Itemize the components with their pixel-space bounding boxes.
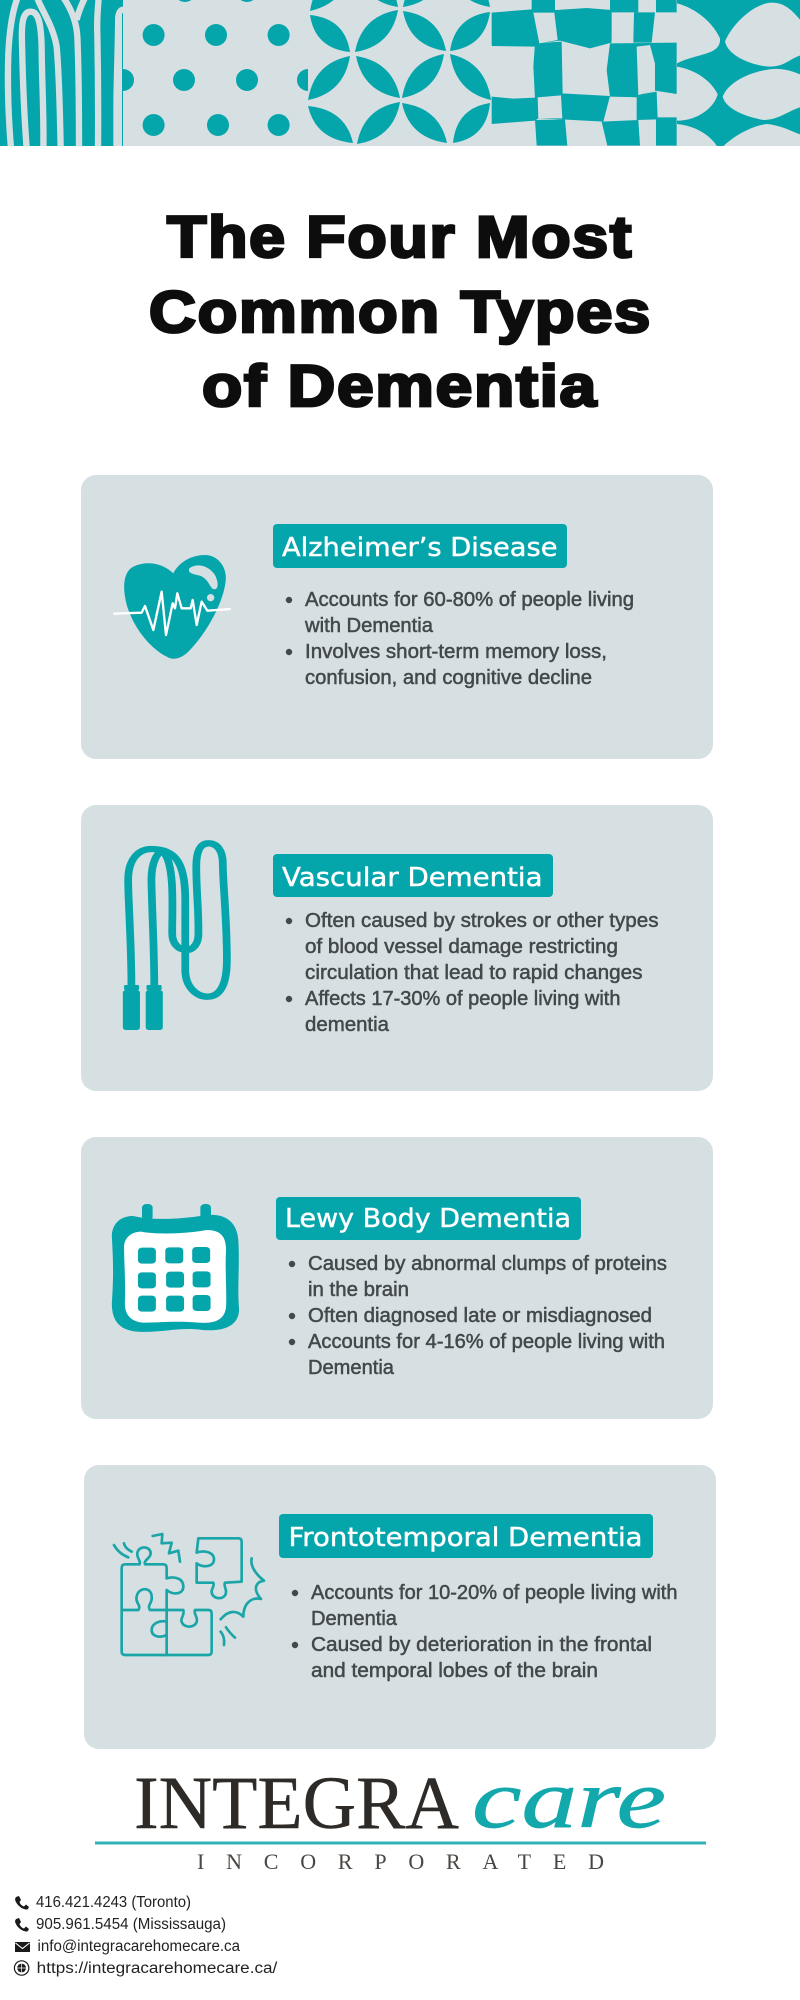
panel background [84,1465,716,1749]
logo: Integra Care Incorporated [95,1753,706,1874]
icon: jump rope [123,843,227,1030]
bullet list: Dementia [311,1608,398,1630]
panel: Frontotemporal Dementia [84,1465,716,1749]
title: of Dementia [202,354,598,419]
heading tag: Lewy Body Dementia [285,1204,571,1234]
bullet list: Often diagnosed late or misdiagnosed [308,1305,652,1327]
bullet list: Accounts for 10-20% of people living with [311,1582,678,1604]
bullet list: with Dementia [304,615,434,637]
bullet list [286,589,634,689]
bullet list: Accounts for 60-80% of people living [305,589,634,611]
contact: website: https://integracarehomecare.ca/ [37,1960,278,1977]
heading tag: Vascular Dementia [282,863,542,893]
title: Common Types [149,280,652,345]
icon: heart with pulse [113,555,231,659]
panel: Alzheimer's Disease [81,475,713,759]
heading tag [273,854,553,897]
bullet list: and temporal lobes of the brain [311,1660,598,1682]
header pattern band [0,0,800,148]
panel: Vascular Dementia [81,805,713,1091]
bullet list [292,1582,678,1682]
heading tag [273,524,567,568]
bullet list: Affects 17-30% of people living with [305,988,620,1010]
pattern: blobs [677,0,800,146]
bullet list: Often caused by strokes or other types [305,910,658,932]
bullet list: Accounts for 4-16% of people living with [308,1331,665,1353]
bullet list: dementia [305,1014,390,1036]
pattern: dots [123,0,308,136]
logo: Integra Care Incorporated: INCORPORATED [197,1849,604,1874]
panel: Lewy Body Dementia [81,1137,713,1419]
bullet list: Caused by deterioration in the frontal [311,1634,652,1656]
icon: calendar [112,1204,239,1332]
contact: Toronto phone: 416.421.4243 (Toronto) [36,1894,191,1911]
bullet list: Involves short-term memory loss, [305,641,607,663]
bullet list: of blood vessel damage restricting [305,936,618,958]
bullet list: Caused by abnormal clumps of proteins [308,1253,667,1275]
pattern: wavy checks [492,0,677,146]
panel background [81,805,713,1091]
bullet list: in the brain [308,1279,409,1301]
heading tag [276,1197,581,1240]
bullet list: circulation that lead to rapid changes [305,962,642,984]
logo: Integra Care Incorporated: INTEGRA [134,1762,459,1845]
heading tag [279,1514,653,1558]
heading tag: Frontotemporal Dementia [288,1523,642,1553]
bullet list: confusion, and cognitive decline [305,667,592,689]
pattern: stripes [0,0,123,146]
heading tag: Alzheimer’s Disease [282,533,558,563]
pattern: petals [308,0,491,144]
panel background [81,475,713,759]
bullet list [289,1253,667,1379]
icon: puzzle pieces [114,1534,264,1655]
title [149,205,652,419]
logo: Integra Care Incorporated: care [472,1753,666,1846]
bullet list [286,910,658,1036]
contact details [14,1894,278,1977]
panel background [81,1137,713,1419]
contact: Mississauga phone: 905.961.5454 (Mississauga) [36,1916,226,1933]
contact: email: info@integracarehomecare.ca [38,1938,240,1955]
bullet list: Dementia [308,1357,395,1379]
title: The Four Most [167,205,633,270]
